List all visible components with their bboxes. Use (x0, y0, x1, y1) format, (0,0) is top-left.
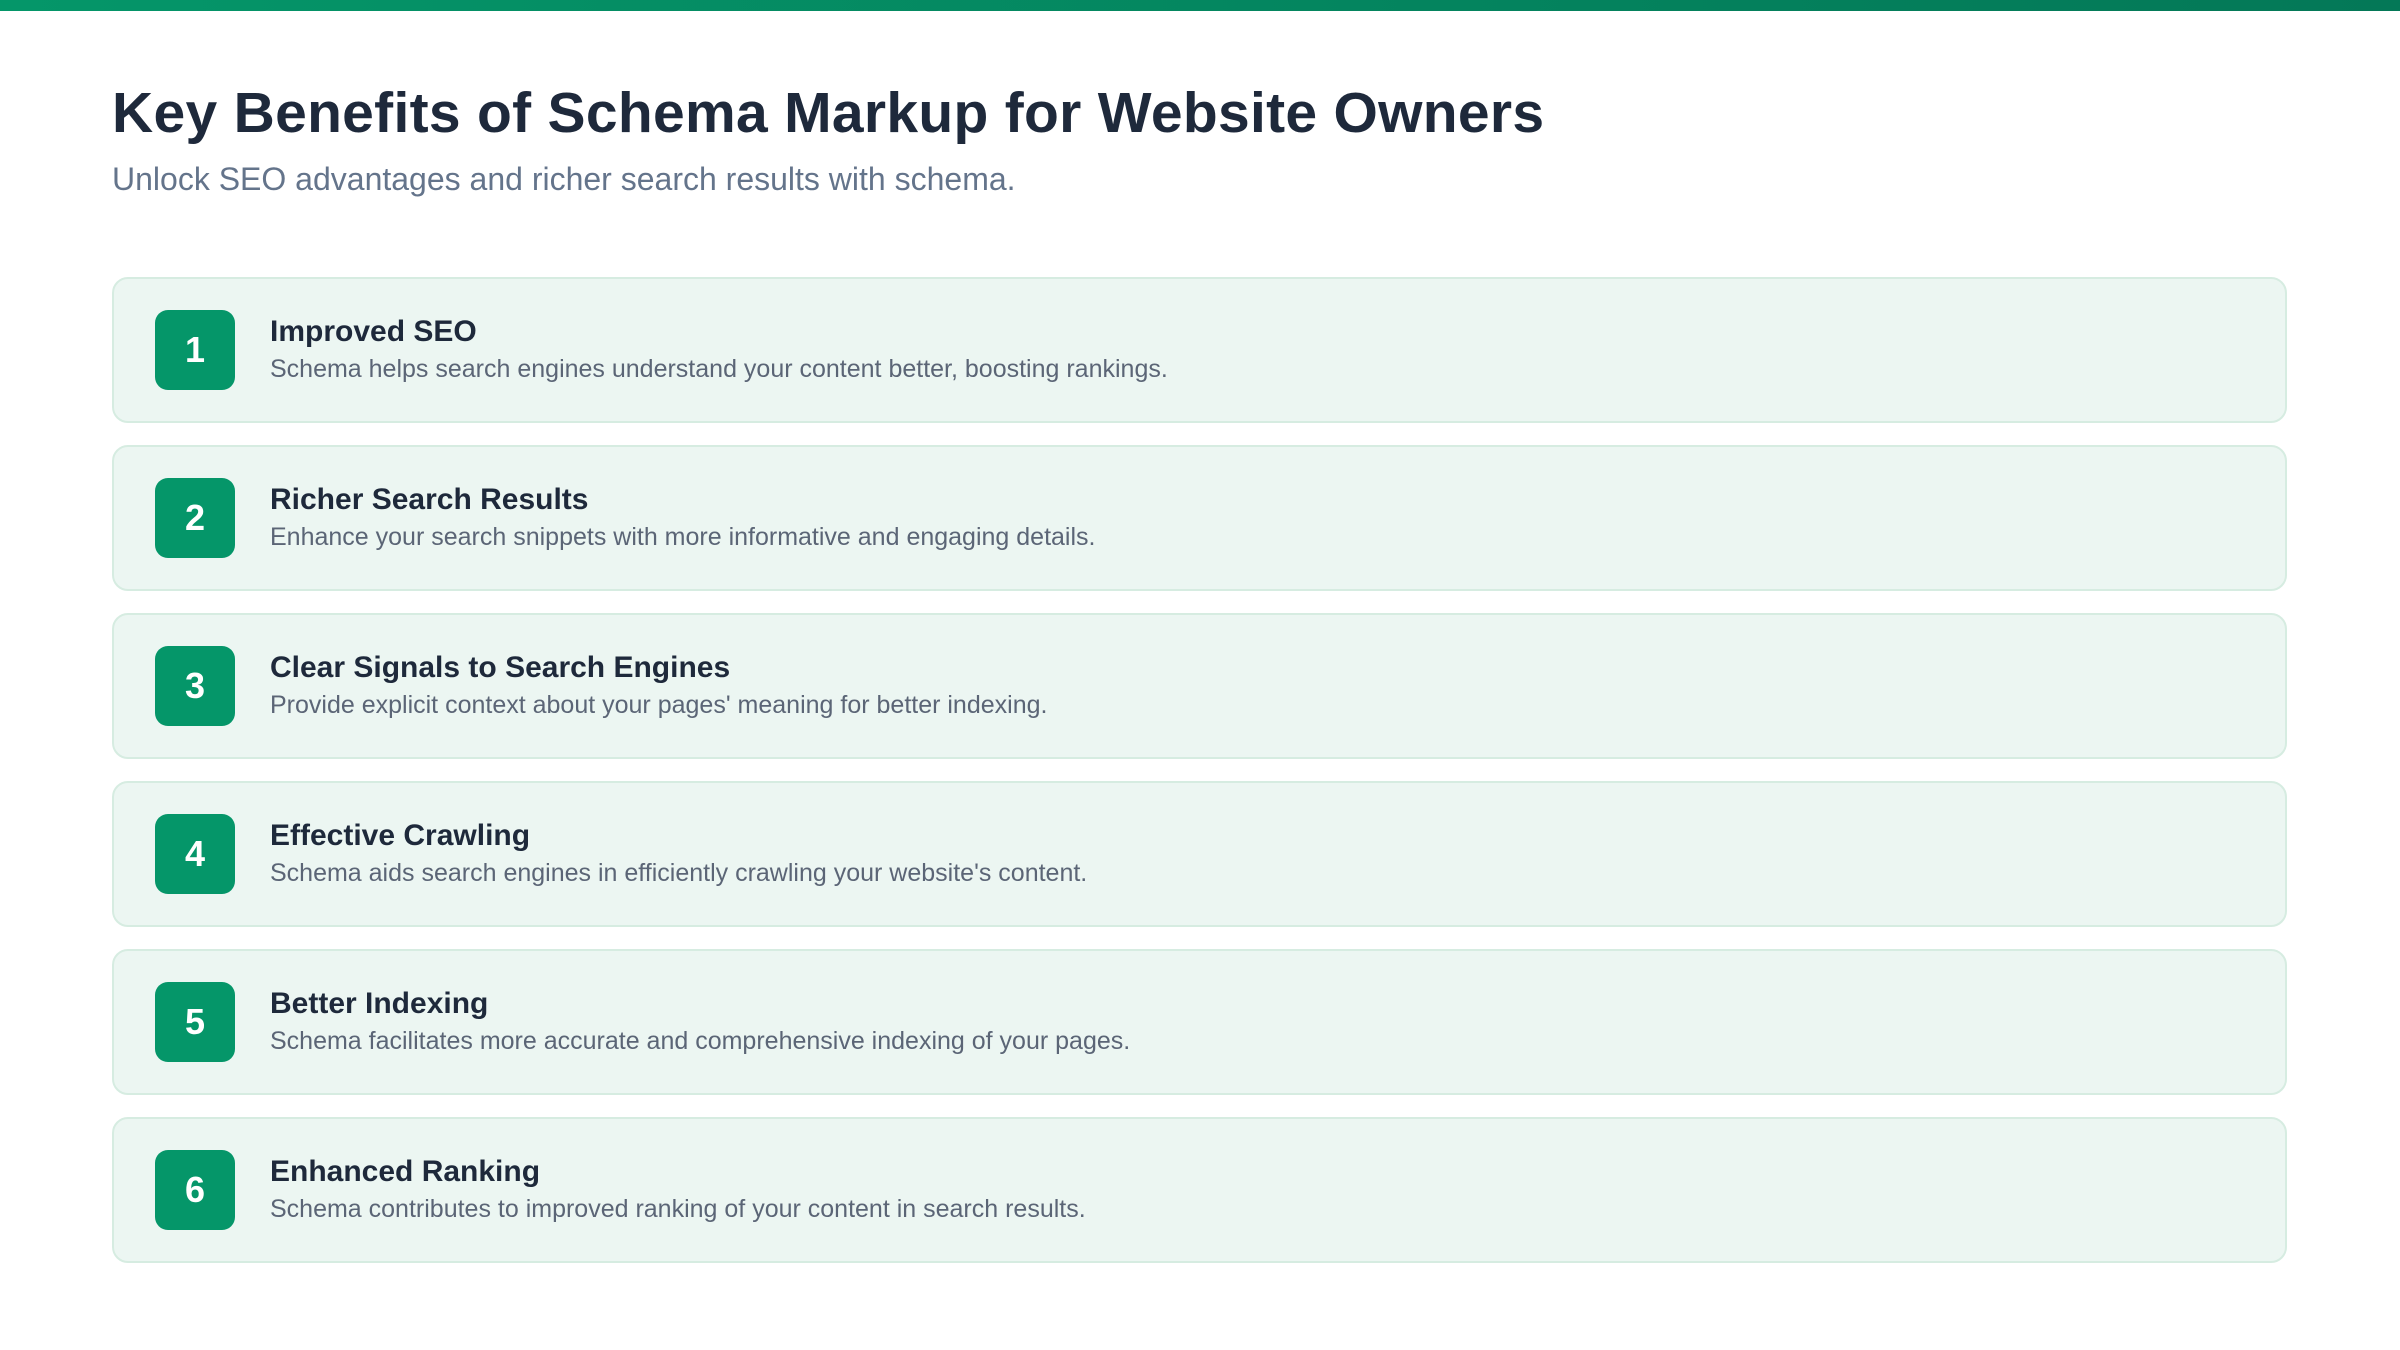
card 2: Richer Search Results (112, 445, 2287, 591)
heading 5: Better Indexing (270, 987, 488, 1020)
badge 3 (155, 646, 235, 726)
badge 2: 2 (185, 497, 205, 538)
card 6: Enhanced Ranking (112, 1117, 2287, 1263)
heading 3: Clear Signals to Search Engines (270, 651, 730, 684)
card 5: Better Indexing (112, 949, 2287, 1095)
badge 6: 6 (185, 1169, 205, 1210)
badge 4 (155, 814, 235, 894)
heading 4: Effective Crawling (270, 819, 530, 852)
card 3: Clear Signals (112, 613, 2287, 759)
badge 4: 4 (185, 833, 205, 874)
badge 2 (155, 478, 235, 558)
description 4: Schema aids search engines in efficiently crawling your website's content. (270, 859, 1087, 887)
top accent bar (0, 0, 2400, 11)
badge 1: 1 (185, 329, 205, 370)
title: Key Benefits of Schema Markup for Website Owners (112, 81, 1544, 145)
heading 6: Enhanced Ranking (270, 1155, 540, 1188)
badge 5 (155, 982, 235, 1062)
description 5: Schema facilitates more accurate and comprehensive indexing of your pages. (270, 1027, 1130, 1055)
badge 3: 3 (185, 665, 205, 706)
badge 5: 5 (185, 1001, 205, 1042)
badge 1 (155, 310, 235, 390)
badge 6 (155, 1150, 235, 1230)
heading 2: Richer Search Results (270, 483, 588, 516)
card 1: Improved SEO (112, 277, 2287, 423)
description 1: Schema helps search engines understand your content better, boosting rankings. (270, 355, 1168, 383)
subtitle: Unlock SEO advantages and richer search results with schema. (112, 161, 1016, 197)
heading 1: Improved SEO (270, 315, 477, 348)
description 6: Schema contributes to improved ranking of your content in search results. (270, 1195, 1086, 1223)
description 2: Enhance your search snippets with more informative and engaging details. (270, 523, 1095, 551)
description 3: Provide explicit context about your pages' meaning for better indexing. (270, 691, 1047, 719)
card 4: Effective Crawling (112, 781, 2287, 927)
